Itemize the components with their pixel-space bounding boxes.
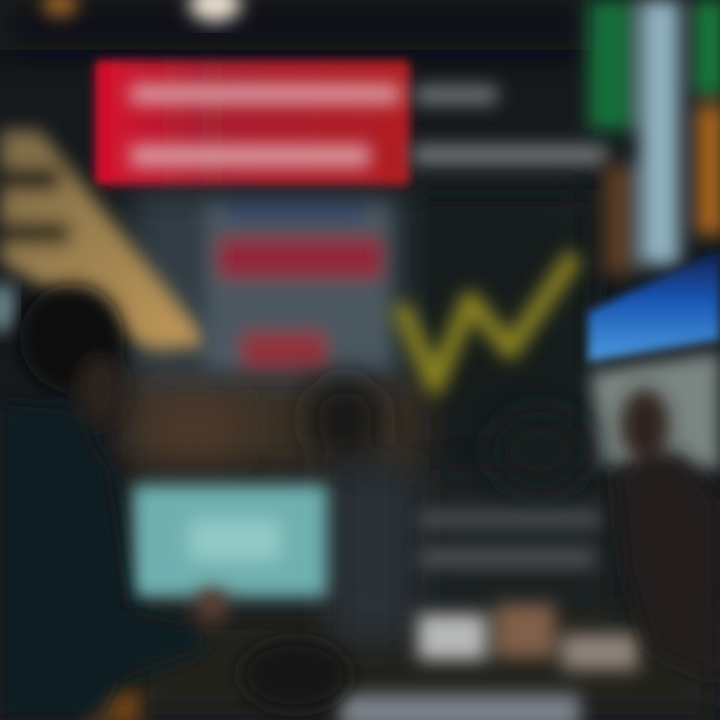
red sign text, blurred: [130, 84, 400, 167]
blue roof: [588, 250, 720, 362]
crowd silhouettes: [150, 378, 590, 640]
ceiling lights: [42, 0, 241, 22]
right lower wall: [590, 352, 720, 470]
teal screen: [132, 484, 328, 598]
grey sign text, blurred: [412, 86, 607, 165]
left pale edge: [0, 285, 14, 330]
bottom right grey text bars: [420, 512, 600, 566]
white table items: [85, 604, 638, 720]
panel: red sign: [95, 60, 410, 185]
right side vertical banners: [588, 0, 720, 275]
panel: central poster: [205, 205, 390, 370]
chart: olive zigzag line: [400, 255, 575, 385]
person right silhouette: [615, 389, 720, 680]
person left silhouette: [0, 284, 228, 720]
foreground head: [240, 639, 350, 711]
tan angled structure: [0, 130, 212, 350]
